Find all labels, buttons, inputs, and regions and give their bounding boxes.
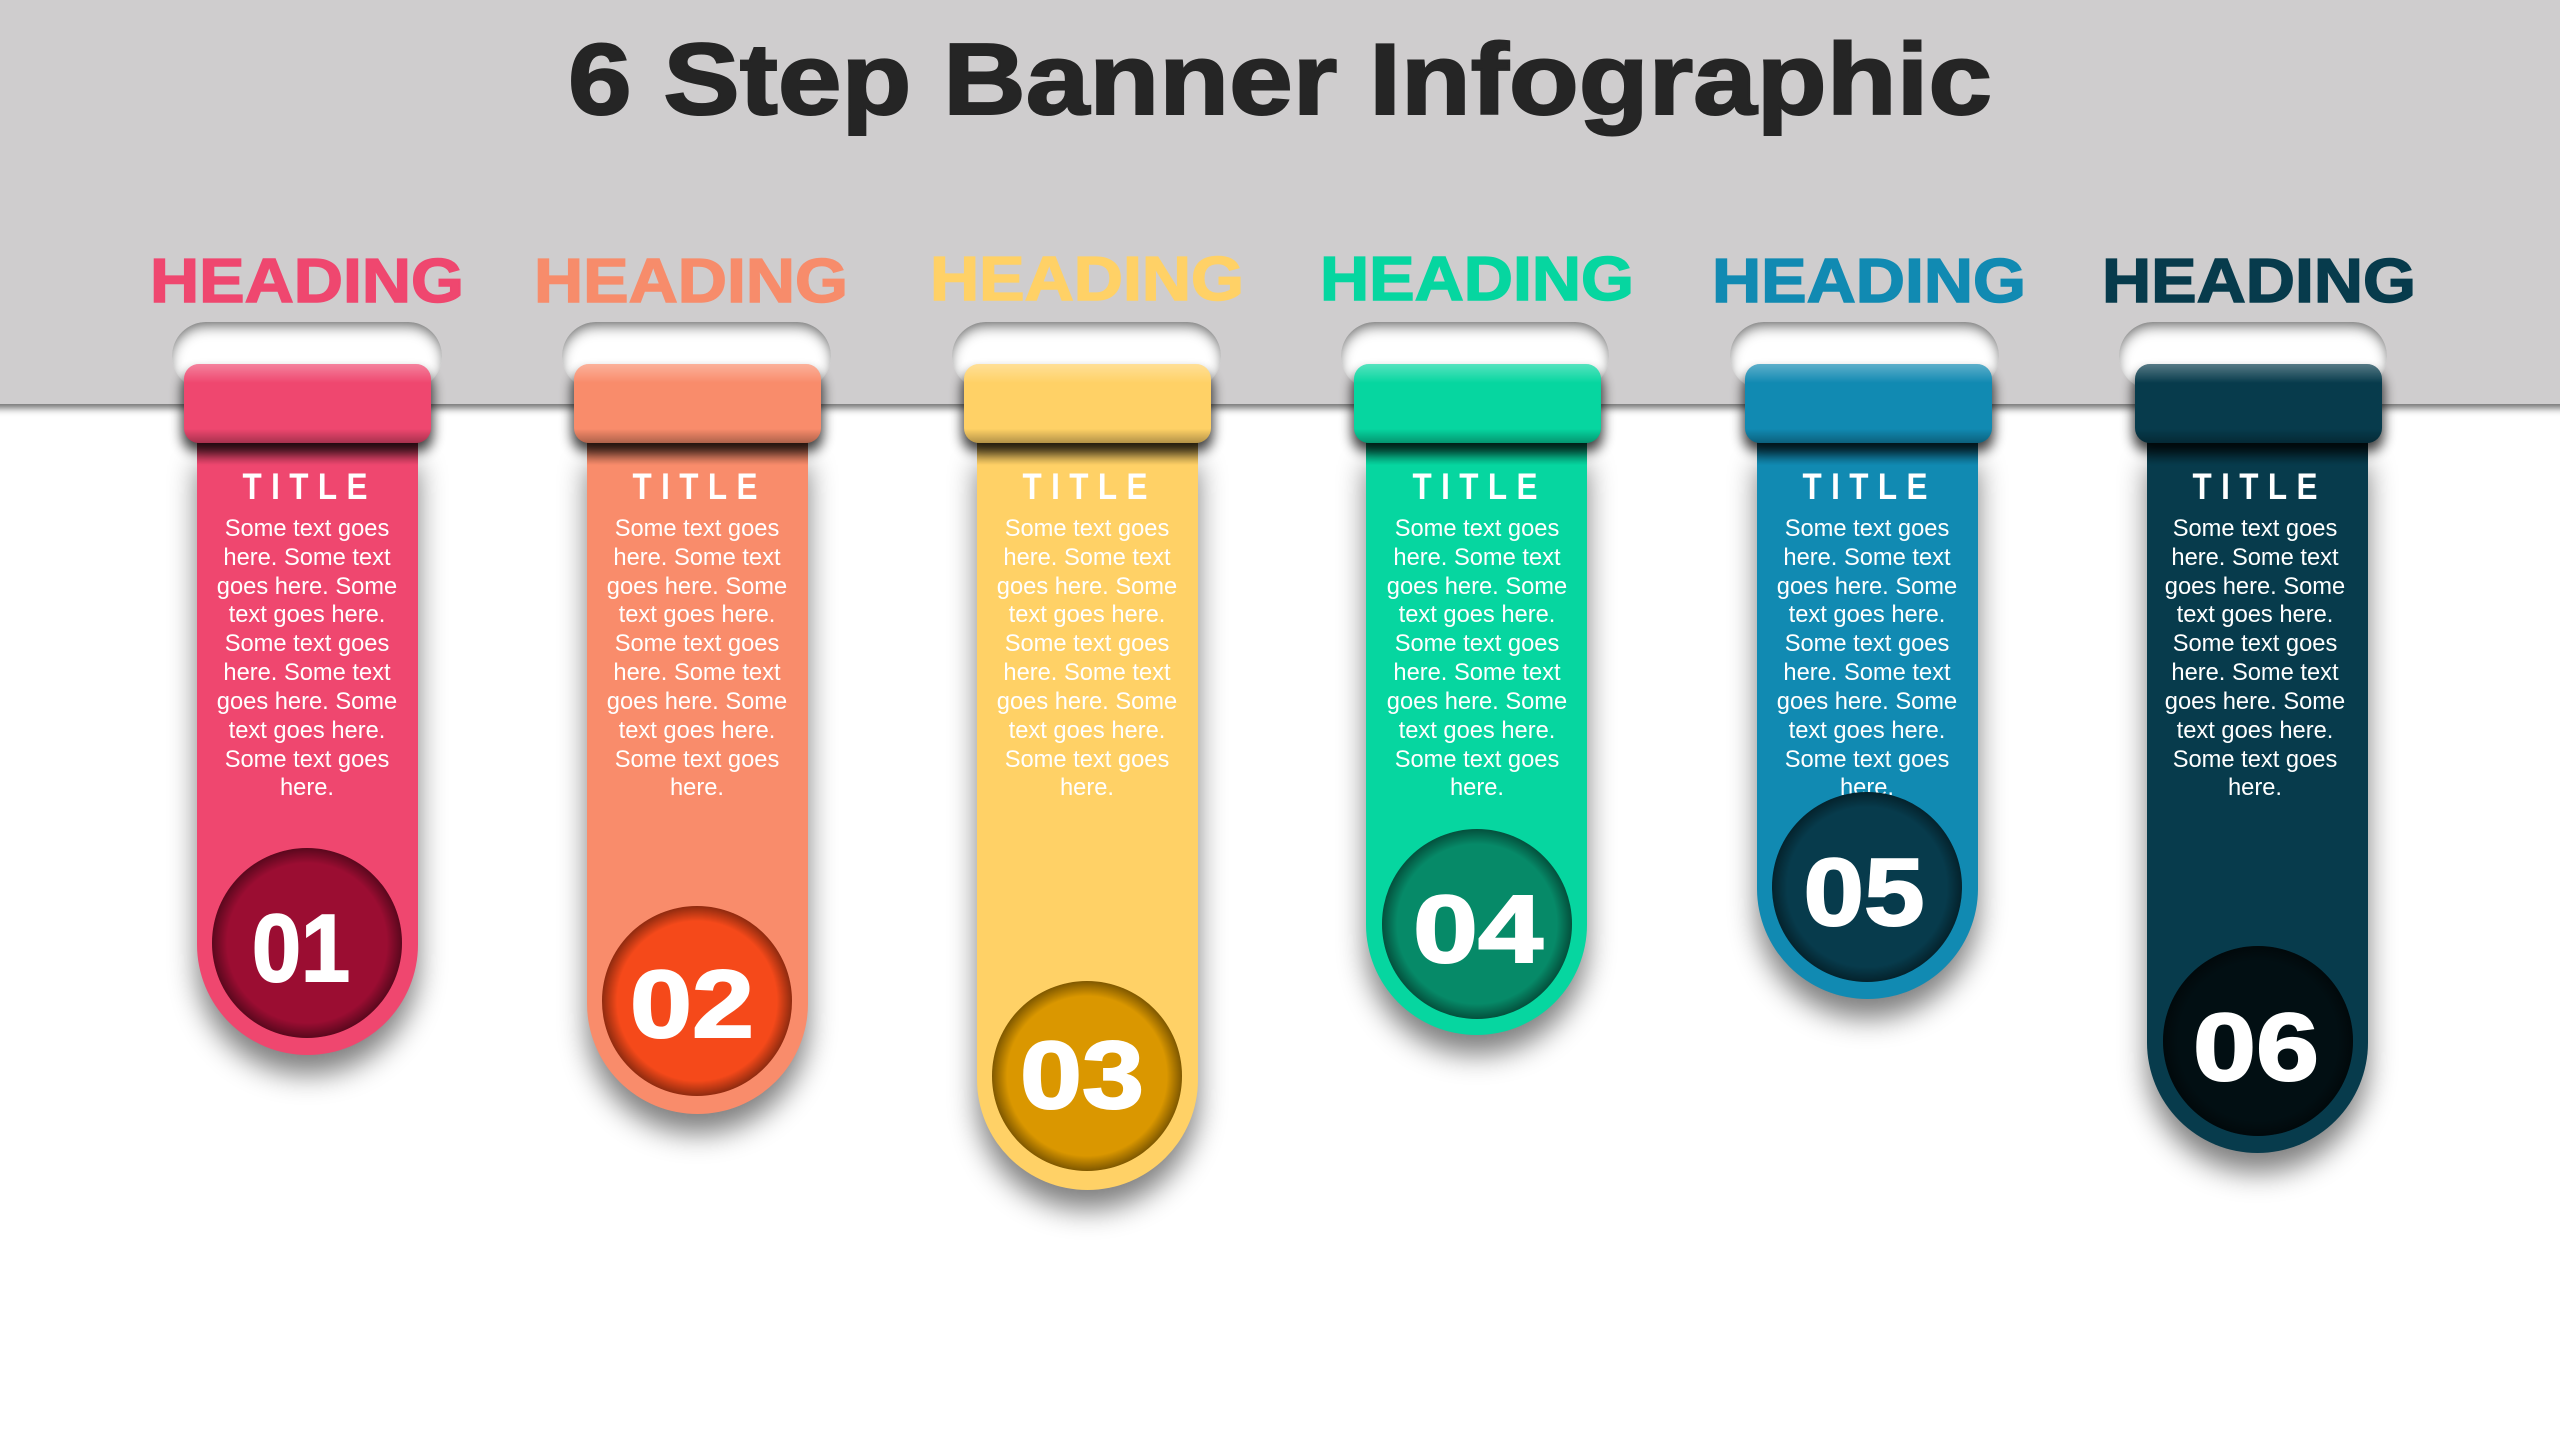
title: 6 Step Banner Infographic xyxy=(568,24,1992,136)
step 6 slot xyxy=(2119,322,2387,390)
step 1 text: text goes here. xyxy=(229,602,385,628)
step 2 text: Some text goes xyxy=(615,747,779,773)
step 1 text: here. Some text xyxy=(223,660,391,686)
step 3 ribbon xyxy=(977,440,1198,1190)
step 5 circle xyxy=(1772,792,1962,982)
step 1 text: Some text goes xyxy=(225,747,389,773)
step 6 clip xyxy=(2135,364,2382,443)
step 1 number: 01 xyxy=(252,895,350,1002)
step 2 text: text goes here. xyxy=(619,602,775,628)
step 5 text: here. Some text xyxy=(1783,545,1951,571)
step 2 xyxy=(534,247,848,1134)
step 1 text: here. xyxy=(280,775,334,801)
step 3 text: Some text goes xyxy=(1005,516,1169,542)
step 5 text: goes here. Some xyxy=(1777,574,1957,600)
step 1 text: text goes here. xyxy=(229,718,385,744)
step 3 text: here. Some text xyxy=(1003,660,1171,686)
step 2 clip shadow xyxy=(572,372,823,452)
step 5 text: text goes here. xyxy=(1789,718,1945,744)
step 5 number: 05 xyxy=(1804,839,1924,946)
step 6 text: text goes here. xyxy=(2177,718,2333,744)
step 3 xyxy=(930,245,1244,1210)
step 2 ribbon xyxy=(587,440,808,1114)
step 6 text: Some text goes xyxy=(2173,631,2337,657)
step 2 text: here. Some text xyxy=(613,660,781,686)
step 1 text: goes here. Some xyxy=(217,689,397,715)
step 2 text: goes here. Some xyxy=(607,689,787,715)
step 2 title: TITLE xyxy=(633,467,757,508)
step 4 clip xyxy=(1354,364,1601,443)
step 1 text: goes here. Some xyxy=(217,574,397,600)
step 4 text: goes here. Some xyxy=(1387,689,1567,715)
step 1 heading: HEADING xyxy=(150,247,464,316)
step 3 text: here. Some text xyxy=(1003,545,1171,571)
step 3 circle xyxy=(992,981,1182,1171)
step 2 text: here. xyxy=(670,775,724,801)
step 5 slot xyxy=(1730,322,1999,390)
step 4 title: TITLE xyxy=(1413,467,1537,508)
step 6 text: Some text goes xyxy=(2173,516,2337,542)
step 5 text: goes here. Some xyxy=(1777,689,1957,715)
step 4 ribbon xyxy=(1366,440,1587,1035)
step 1 ribbon shadow xyxy=(197,465,418,1074)
step 5 ribbon shadow xyxy=(1757,465,1978,1019)
step 5 ribbon xyxy=(1757,440,1978,999)
step 6 xyxy=(2102,247,2416,1173)
step 4 slot xyxy=(1341,322,1609,390)
step 1 clip xyxy=(184,364,431,443)
step 2 circle xyxy=(602,906,792,1096)
step 6 text: text goes here. xyxy=(2177,602,2333,628)
step 4 circle xyxy=(1382,829,1572,1019)
step 4 text: here. xyxy=(1450,775,1504,801)
step 1 xyxy=(150,247,464,1074)
step 3 text: text goes here. xyxy=(1009,718,1165,744)
step 6 ribbon xyxy=(2147,440,2368,1153)
step 6 text: here. Some text xyxy=(2171,660,2339,686)
step 5 text: text goes here. xyxy=(1789,602,1945,628)
step 4 text: text goes here. xyxy=(1399,718,1555,744)
step 2 text: here. Some text xyxy=(613,545,781,571)
step 6 number: 06 xyxy=(2193,994,2319,1101)
step 4 text: Some text goes xyxy=(1395,747,1559,773)
step 5 text: Some text goes xyxy=(1785,747,1949,773)
step 4 text: Some text goes xyxy=(1395,631,1559,657)
step 3 number: 03 xyxy=(1020,1022,1144,1129)
step 3 text: text goes here. xyxy=(1009,602,1165,628)
step 2 ribbon shadow xyxy=(587,465,808,1134)
step 6 clip shadow xyxy=(2133,372,2384,452)
step 3 text: goes here. Some xyxy=(997,689,1177,715)
step 3 clip shadow xyxy=(962,372,1213,452)
step 2 text: Some text goes xyxy=(615,631,779,657)
step 6 title: TITLE xyxy=(2193,467,2317,508)
step 2 heading: HEADING xyxy=(534,247,848,316)
step 6 text: goes here. Some xyxy=(2165,689,2345,715)
step 2 text: text goes here. xyxy=(619,718,775,744)
step 4 heading: HEADING xyxy=(1320,245,1634,314)
step 3 text: here. xyxy=(1060,775,1114,801)
step 3 clip xyxy=(964,364,1211,443)
step 1 clip shadow xyxy=(182,372,433,452)
step 1 text: Some text goes xyxy=(225,631,389,657)
step 2 number: 02 xyxy=(630,951,754,1058)
step 3 ribbon shadow xyxy=(977,465,1198,1210)
step 5 xyxy=(1712,247,2026,1019)
step 2 clip xyxy=(574,364,821,443)
step 3 heading: HEADING xyxy=(930,245,1244,314)
step 1 ribbon xyxy=(197,440,418,1055)
step 5 title: TITLE xyxy=(1803,467,1927,508)
step 6 text: here. Some text xyxy=(2171,545,2339,571)
step 5 text: Some text goes xyxy=(1785,631,1949,657)
step 3 text: Some text goes xyxy=(1005,747,1169,773)
step 5 clip xyxy=(1745,364,1992,443)
step 3 title: TITLE xyxy=(1023,467,1147,508)
step 4 text: Some text goes xyxy=(1395,516,1559,542)
step 2 text: goes here. Some xyxy=(607,574,787,600)
step 6 text: Some text goes xyxy=(2173,747,2337,773)
step 1 text: Some text goes xyxy=(225,516,389,542)
step 4 text: here. Some text xyxy=(1393,545,1561,571)
step 3 text: Some text goes xyxy=(1005,631,1169,657)
step 4 text: text goes here. xyxy=(1399,602,1555,628)
step 1 title: TITLE xyxy=(243,467,367,508)
step 2 slot xyxy=(562,322,831,390)
step 2 text: Some text goes xyxy=(615,516,779,542)
step 5 text: Some text goes xyxy=(1785,516,1949,542)
banner xyxy=(0,0,2560,408)
step 1 circle xyxy=(212,848,402,1038)
step 6 circle xyxy=(2163,946,2353,1136)
step 6 text: goes here. Some xyxy=(2165,574,2345,600)
step 4 text: goes here. Some xyxy=(1387,574,1567,600)
step 4 clip shadow xyxy=(1352,372,1603,452)
step 4 number: 04 xyxy=(1413,876,1543,983)
step 3 slot xyxy=(952,322,1221,390)
step 6 heading: HEADING xyxy=(2102,247,2416,316)
step 3 text: goes here. Some xyxy=(997,574,1177,600)
step 4 text: here. Some text xyxy=(1393,660,1561,686)
step 6 text: here. xyxy=(2228,775,2282,801)
step 5 text: here. xyxy=(1840,775,1894,801)
step 5 clip shadow xyxy=(1743,372,1994,452)
step 5 text: here. Some text xyxy=(1783,660,1951,686)
step 5 heading: HEADING xyxy=(1712,247,2026,316)
step 4 xyxy=(1320,245,1634,1054)
step 4 ribbon shadow xyxy=(1366,465,1587,1054)
step 6 ribbon shadow xyxy=(2147,465,2368,1173)
step 1 slot xyxy=(172,322,442,390)
step 1 text: here. Some text xyxy=(223,545,391,571)
